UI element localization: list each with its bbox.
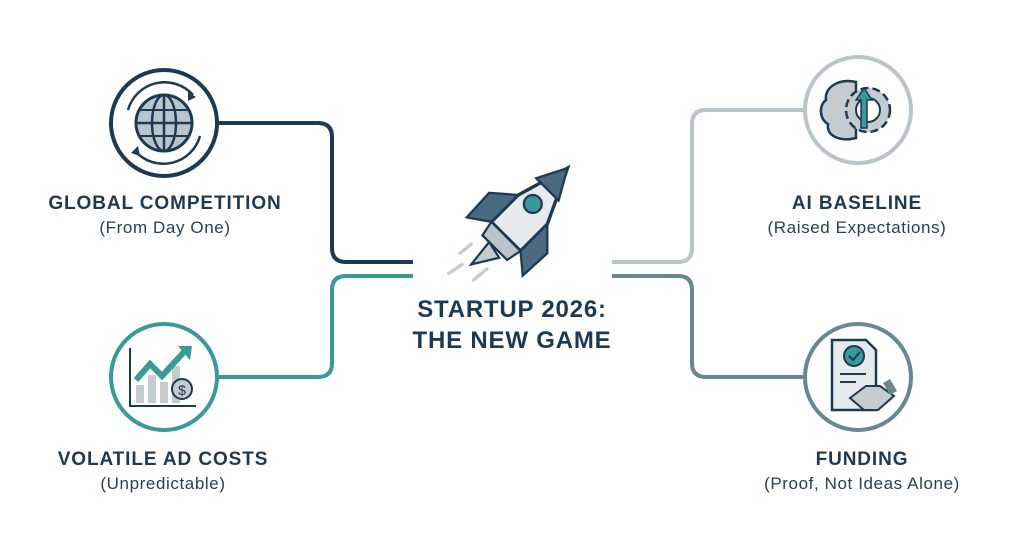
label: AI baseline: AI BASELINE: [792, 193, 922, 214]
icon: rocket: [449, 168, 568, 280]
icon: globe circle: [111, 70, 217, 176]
icon: funding document handshake circle: [805, 324, 911, 430]
label: volatile ad costs: (Unpredictable): [100, 474, 226, 493]
icon: chart circle: $: [178, 382, 186, 398]
label: global competition: GLOBAL COMPETITION: [48, 193, 282, 214]
icon: chart circle: [111, 324, 217, 430]
label: volatile ad costs: VOLATILE AD COSTS: [58, 449, 268, 470]
label: AI baseline: [768, 193, 946, 237]
connector: global competition: [218, 123, 413, 262]
label: AI baseline: (Raised Expectations): [768, 218, 946, 237]
label: funding: [764, 449, 960, 493]
connector: funding: [612, 276, 807, 377]
center title: STARTUP 2026:: [417, 296, 607, 323]
label: global competition: [48, 193, 282, 237]
connector: volatile ad costs: [216, 276, 413, 377]
label: funding: (Proof, Not Ideas Alone): [764, 474, 960, 493]
center title: THE NEW GAME: [413, 327, 611, 354]
center title: [412, 296, 611, 354]
label: funding: FUNDING: [816, 449, 908, 470]
connector: AI baseline: [612, 110, 807, 262]
icon: AI brain gear circle: [805, 57, 911, 163]
label: volatile ad costs: [58, 449, 268, 493]
label: global competition: (From Day One): [99, 218, 231, 237]
